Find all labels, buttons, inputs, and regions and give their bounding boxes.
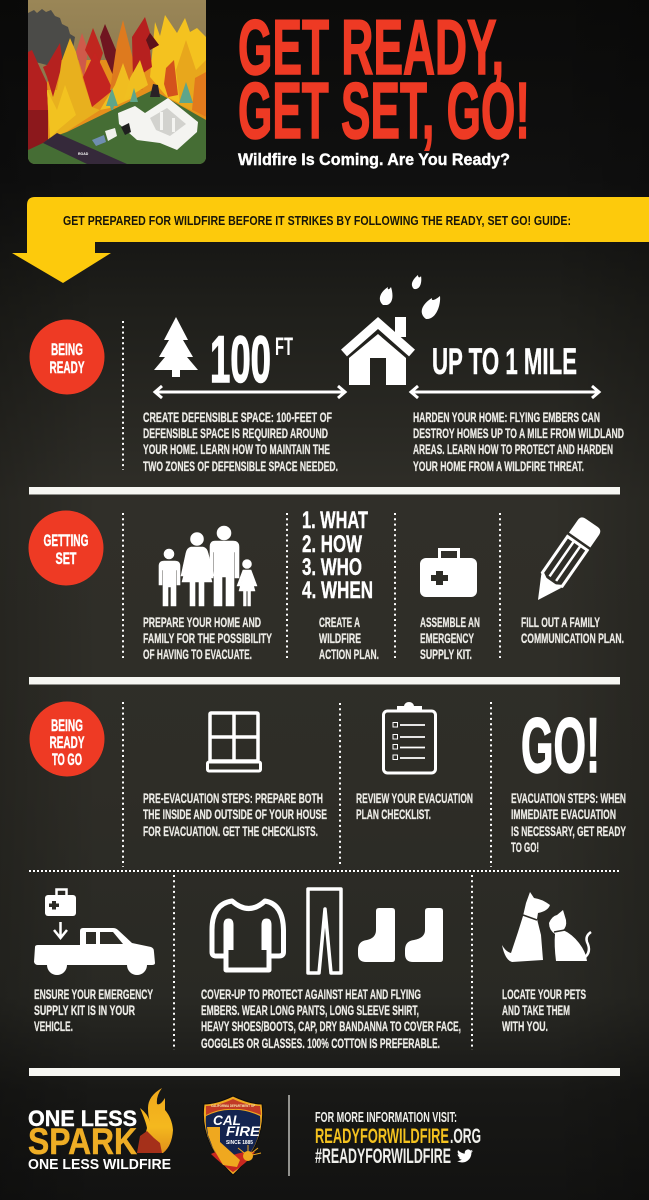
panel: leaving actions	[34, 875, 591, 1051]
flame	[137, 1088, 173, 1153]
list: action plan steps	[302, 507, 373, 604]
icon: boots	[358, 908, 443, 962]
text: review checklist	[356, 791, 473, 822]
text: communication plan	[521, 615, 624, 646]
logo: cal fire shield: CALIFORNIA DEPARTMENT OF	[211, 1104, 256, 1108]
text: pets: AND TAKE THEM	[502, 1003, 570, 1018]
arrow: 100 ft span	[155, 386, 345, 398]
text: action plan: CREATE A	[319, 615, 360, 630]
icon: first aid kit	[420, 550, 477, 597]
text: defensible space: YOUR HOME. LEARN HOW TO MAINTAIN THE	[143, 442, 330, 457]
arrow: up to 1 mile span	[411, 386, 599, 398]
text: defensible space: CREATE DEFENSIBLE SPACE: 100-FEET OF	[143, 410, 332, 425]
text: evacuation steps	[511, 791, 626, 855]
stat: 100 ft: 100	[210, 322, 271, 396]
logo: cal fire shield: CAL	[213, 1113, 241, 1128]
ground	[28, 90, 206, 164]
vehicles	[105, 128, 117, 141]
bear silhouette	[150, 84, 160, 97]
text: pets: WITH YOU.	[502, 1019, 548, 1034]
text: vehicle: ENSURE YOUR EMERGENCY	[34, 987, 153, 1002]
icon: long pants	[308, 889, 341, 973]
icon: dog and cat	[502, 892, 591, 962]
icon: twitter bird	[457, 1149, 473, 1163]
logo: cal fire shield	[203, 1096, 263, 1175]
wildfire illustration	[28, 0, 206, 164]
list: action plan steps: 4. WHEN	[302, 577, 373, 604]
icon: long sleeve shirt	[212, 901, 284, 970]
text: prepare: PREPARE YOUR HOME AND	[143, 615, 261, 630]
footer links	[315, 1110, 481, 1168]
panel: being ready	[30, 275, 624, 474]
text: supply kit: ASSEMBLE AN	[420, 615, 480, 630]
icon: pencil	[527, 515, 602, 607]
stat: 100 ft: FT	[275, 333, 293, 361]
wildfire illustration: ROAD	[78, 152, 89, 156]
text: supply kit	[420, 615, 480, 662]
text: pre-evacuation	[143, 791, 327, 839]
text: cover up: HEAVY SHOES/BOOTS, CAP, DRY BANDANNA TO COVER FACE,	[201, 1019, 461, 1034]
logo: one less spark: ONE LESS WILDFIRE	[28, 1157, 171, 1173]
text: prepare: FAMILY FOR THE POSSIBILITY	[143, 631, 272, 646]
icon: window	[208, 713, 260, 771]
small trees	[106, 82, 193, 110]
logo: one less spark: ONE LESS	[28, 1106, 137, 1131]
list: action plan steps: 2. HOW	[302, 531, 362, 558]
panel: being ready to go	[30, 701, 626, 867]
list: action plan steps: 3. WHO	[302, 554, 362, 581]
subtitle: Wildfire Is Coming. Are You Ready?	[238, 151, 510, 169]
text: pre-evacuation: FOR EVACUATION. GET THE CHECKLISTS.	[143, 824, 318, 839]
text: defensible space	[143, 410, 338, 474]
footer links: READYFORWILDFIRE	[315, 1125, 449, 1148]
text: defensible space: TWO ZONES OF DEFENSIBLE SPACE NEEDED.	[143, 459, 338, 474]
text: communication plan: FILL OUT A FAMILY	[521, 615, 600, 630]
banner text: GET PREPARED FOR WILDFIRE BEFORE IT STRIKES BY FOLLOWING THE READY, SET GO! GUIDE:	[63, 214, 571, 228]
house	[118, 98, 198, 150]
text: vehicle	[34, 987, 153, 1034]
text: defensible space: DEFENSIBLE SPACE IS REQUIRED AROUND	[143, 426, 328, 441]
list: action plan steps: 1. WHAT	[302, 507, 368, 534]
logo: one less spark: SPARK	[28, 1121, 137, 1162]
text: review checklist: PLAN CHECKLIST.	[356, 807, 431, 822]
text: action plan: ACTION PLAN.	[319, 647, 379, 662]
icon: family	[159, 526, 257, 606]
logo: cal fire shield: FIRE	[226, 1124, 261, 1139]
footer links: FOR MORE INFORMATION VISIT:	[315, 1110, 457, 1126]
badge: getting set: SET	[56, 549, 77, 568]
title	[238, 3, 530, 155]
text: vehicle: SUPPLY KIT IS IN YOUR	[34, 1003, 135, 1018]
text: pets	[502, 987, 586, 1034]
footer links: .ORG	[450, 1125, 481, 1148]
badge: being ready to go: BEING	[51, 716, 83, 735]
text: action plan	[319, 615, 379, 662]
road	[43, 133, 127, 164]
text: pets: LOCATE YOUR PETS	[502, 987, 586, 1002]
text: cover up	[201, 987, 461, 1051]
icon: clipboard checklist	[384, 702, 436, 773]
footer links: #READYFORWILDFIRE	[315, 1145, 451, 1168]
logo: one less spark	[28, 1088, 173, 1173]
badge: being ready: BEING	[51, 340, 83, 359]
text: action plan: WILDFIRE	[319, 631, 361, 646]
text: vehicle: VEHICLE.	[34, 1019, 73, 1034]
text: review checklist: REVIEW YOUR EVACUATION	[356, 791, 473, 806]
text: prepare	[143, 615, 272, 662]
text: prepare: OF HAVING TO EVACUATE.	[143, 647, 252, 662]
badge: being ready: READY	[50, 358, 85, 377]
badge: getting set: GETTING	[44, 531, 88, 550]
icon: pine tree	[154, 317, 198, 377]
yellow banner with arrow	[12, 197, 649, 283]
text: pre-evacuation: PRE-EVACUATION STEPS: PREPARE BOTH	[143, 791, 323, 806]
badge: being ready to go	[30, 702, 104, 776]
badge: being ready to go: READY	[50, 733, 85, 752]
icon: kit into truck	[34, 890, 155, 975]
badge: being ready	[30, 320, 104, 394]
text: cover up: GOGGLES OR GLASSES. 100% COTTON IS PREFERABLE.	[201, 1036, 440, 1051]
text: evacuation steps: TO GO!	[511, 840, 539, 855]
text: supply kit: SUPPLY KIT.	[420, 647, 472, 662]
text: supply kit: EMERGENCY	[420, 631, 474, 646]
text: harden your home	[413, 410, 624, 474]
text: cover up: COVER-UP TO PROTECT AGAINST HEAT AND FLYING	[201, 987, 421, 1002]
icon: house with embers	[344, 275, 440, 385]
text: cover up: EMBERS. WEAR LONG PANTS, LONG SLEEVE SHIRT,	[201, 1003, 419, 1018]
logo: cal fire shield: SINCE 1885	[226, 1140, 253, 1146]
badge: getting set	[28, 510, 104, 586]
text: pre-evacuation: THE INSIDE AND OUTSIDE OF YOUR HOUSE	[143, 807, 327, 822]
badge: being ready to go: TO GO	[52, 750, 82, 769]
panel: getting set	[28, 507, 624, 662]
